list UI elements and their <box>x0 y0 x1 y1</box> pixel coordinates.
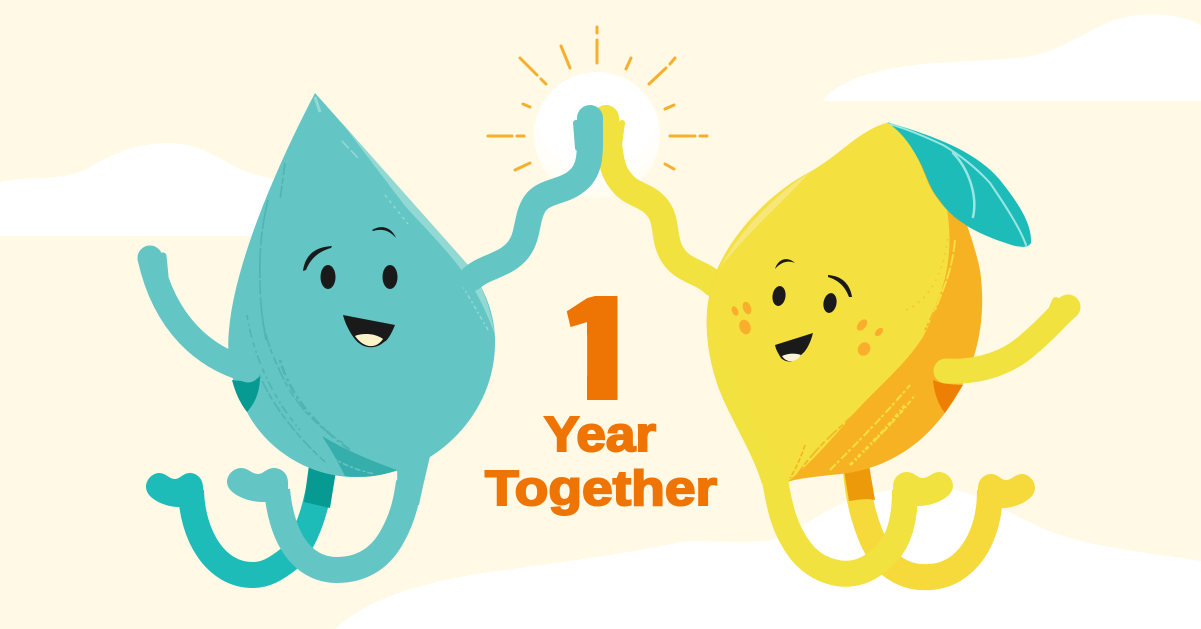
drop eyebrows <box>303 227 396 271</box>
water drop raised arm and hand <box>472 118 590 278</box>
lemon eyebrows <box>775 259 852 297</box>
lemon dark patch <box>933 380 963 413</box>
lemon tooth <box>782 354 801 361</box>
lemon highlight <box>720 172 810 268</box>
leaf veins <box>890 124 1026 245</box>
drop eyes <box>320 265 398 289</box>
drop back foot <box>146 473 203 507</box>
word: Year: Year <box>544 408 656 462</box>
word: Together: Together <box>485 462 717 516</box>
drop raised thumb <box>576 123 578 148</box>
lemon side flecks <box>830 240 955 470</box>
cloud: top right <box>823 14 1201 101</box>
lemon raised thumb <box>619 123 622 145</box>
drop left thumb <box>163 256 165 276</box>
leaf <box>887 122 1031 247</box>
water drop back leg <box>146 465 337 575</box>
water drop left arm <box>150 256 248 370</box>
drop texture strokes <box>247 163 375 474</box>
drop highlight flecks <box>315 97 488 330</box>
lemon right thumb <box>1047 301 1056 322</box>
drop back leg shadow <box>304 465 337 508</box>
lemon yellow face <box>707 123 950 483</box>
lemon body <box>707 123 982 483</box>
water drop face <box>303 227 398 347</box>
drop edge highlight <box>342 123 495 335</box>
water drop front leg <box>227 456 430 570</box>
lemon raised arm <box>606 118 714 284</box>
drop tooth <box>355 334 383 346</box>
lemon back foot <box>978 474 1035 508</box>
water drop body <box>228 93 495 477</box>
drop lower dark band <box>322 436 397 477</box>
lemon freckles <box>730 301 885 358</box>
lemon front foot <box>893 472 953 506</box>
drop mouth <box>343 315 395 347</box>
lemon face <box>730 259 885 361</box>
numeral 1: 1 <box>563 272 642 431</box>
lemon eyes <box>771 285 838 314</box>
lemon right arm <box>946 301 1068 371</box>
lemon back leg <box>843 465 1035 577</box>
drop leg root <box>393 456 430 506</box>
lemon texture strokes <box>790 230 953 478</box>
lemon front leg <box>716 363 953 574</box>
sun <box>488 27 707 198</box>
drop armpit shade <box>232 376 260 412</box>
lemon back leg shadow <box>843 465 875 501</box>
lemon leg upper blend <box>716 363 788 484</box>
sun rays <box>488 27 707 170</box>
lemon mouth <box>775 333 813 361</box>
drop front foot <box>227 468 288 502</box>
cloud: left <box>0 143 300 236</box>
cloud: bottom <box>335 487 1201 629</box>
heading: 1 Year Together <box>485 272 717 516</box>
